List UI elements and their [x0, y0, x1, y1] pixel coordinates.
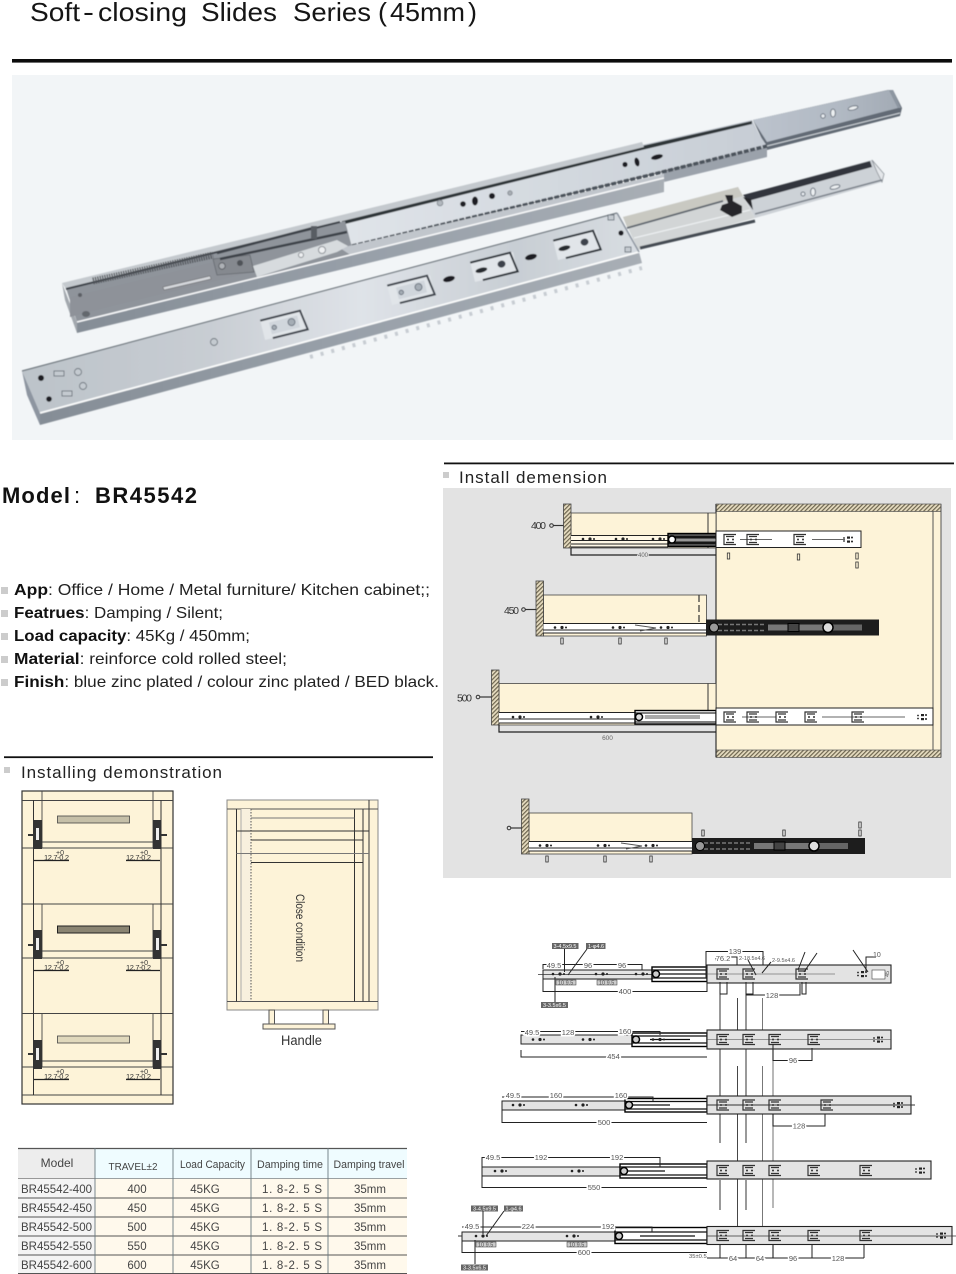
drawer 500: 600 [602, 735, 613, 742]
drawer 500 [457, 670, 933, 742]
feature: Load capacity: Load capacity : 45Kg / 450mm; [14, 628, 250, 645]
cabinet-side dimensions: 2-18.5x4.6 [739, 956, 765, 962]
table body: BR45542-500 [21, 1222, 92, 1234]
drawer 400 [531, 504, 861, 568]
cabinet-side dimensions: 2-9.5x4.6 [772, 958, 795, 964]
table body: 600 [127, 1260, 147, 1272]
table body: 35mm [354, 1203, 386, 1215]
drawer 1 detail: 12.7-0.2 [126, 853, 151, 862]
drawer 3 detail [28, 1036, 167, 1081]
drawer 500: 500 [457, 692, 472, 704]
slide 450: 128 [562, 1028, 574, 1037]
section heading: Install demension: Install demension [459, 468, 607, 487]
slide 600: 600 [578, 1248, 590, 1257]
hole labels: 3-3.5x6.5 [463, 1266, 486, 1272]
table body: BR45542-550 [21, 1241, 92, 1253]
hole labels: 10 9.5 [558, 980, 573, 986]
hole labels [541, 943, 617, 1009]
table body: 1. 8-2. 5 S [262, 1260, 322, 1272]
drawer 3 detail: 12.7-0.2 [44, 1072, 69, 1081]
feature: Featrues: Featrues: Damping / Silent; [14, 605, 223, 622]
table body: 35mm [354, 1260, 386, 1272]
vertical alignment lines [720, 985, 773, 1258]
slide 450: 96 [789, 1056, 797, 1065]
slide 600 [458, 1206, 956, 1272]
slide 550: 192 [535, 1153, 547, 1162]
slide 400: 400 [619, 987, 631, 996]
lower slide slots [260, 310, 308, 340]
table body: 450 [127, 1203, 147, 1215]
table body: 45KG [190, 1260, 220, 1272]
table body: 1. 8-2. 5 S [262, 1241, 322, 1253]
lower slide [22, 160, 884, 425]
hole labels: 10 9.5 [569, 1242, 584, 1248]
upper slide [62, 90, 902, 333]
slide 550: 192 [611, 1153, 623, 1162]
drawer 2 detail: +0 [56, 960, 64, 967]
cabinet-side dimensions: 139 [729, 947, 741, 956]
specification table [18, 1148, 407, 1274]
table body [18, 1148, 407, 1274]
upper slide holes [460, 153, 663, 207]
slide 600: 224 [522, 1222, 534, 1231]
drawer 400: 400 [638, 553, 649, 559]
table body: 35mm [354, 1222, 386, 1234]
drawer 2 detail: 12.7-0.2 [44, 963, 69, 972]
outer rail [40, 252, 642, 425]
slide 400: 96 [618, 961, 626, 970]
drawer 400: 400 [531, 520, 546, 532]
model heading: : [74, 483, 80, 508]
slide 550: 550 [588, 1183, 600, 1192]
cabinet-side dimensions: 76.2 [716, 954, 730, 963]
drawer 1 detail: +0 [140, 850, 148, 857]
table body: 550 [127, 1241, 147, 1253]
slide 400: 49.5 [547, 961, 561, 970]
drawer 2 detail [28, 926, 167, 972]
table body: 35mm [354, 1184, 386, 1196]
drawer 450 [504, 581, 879, 644]
slide 500: 160 [550, 1091, 562, 1100]
section heading: Installing demonstration: Installing demonstration [21, 763, 222, 782]
slide 450 [521, 1027, 891, 1065]
drawer 2 detail: +0 [140, 960, 148, 967]
feature: Material: Material : reinforce cold rolled steel; [14, 651, 287, 668]
slide 500: 160 [615, 1091, 627, 1100]
diagram: side view, close condition with handle [227, 800, 378, 1048]
table body: 1. 8-2. 5 S [262, 1184, 322, 1196]
table header: Model [41, 1156, 73, 1170]
slide 400 [538, 943, 891, 1009]
slide 600: 64 [756, 1254, 764, 1263]
model heading: Model [2, 483, 70, 508]
hole labels: 3-4.5x9.5 [473, 1206, 496, 1212]
cabinet [716, 504, 941, 758]
section heading: Installing demonstration [4, 756, 433, 782]
slide 450: 49.5 [525, 1028, 539, 1037]
handle [263, 1010, 335, 1048]
table body: 35mm [354, 1241, 386, 1253]
close condition label: Close condition [293, 894, 305, 962]
table body: 45KG [190, 1184, 220, 1196]
spring [93, 255, 213, 281]
middle rail [623, 187, 755, 250]
slide 500: 500 [598, 1118, 610, 1127]
handle: Handle [281, 1033, 322, 1048]
slide 500: 49.5 [506, 1091, 520, 1100]
table body: 45KG [190, 1222, 220, 1234]
hole labels: 1-φ4.6 [588, 944, 604, 950]
table body: BR45542-400 [21, 1184, 92, 1196]
table body: 400 [127, 1184, 147, 1196]
slide 600: 192 [602, 1222, 614, 1231]
table body: 500 [127, 1222, 147, 1234]
table header: Damping travel [334, 1159, 404, 1171]
product photo: two ball-bearing drawer slides [12, 75, 953, 440]
drawer closed position [507, 799, 865, 862]
table header: Damping time [257, 1159, 323, 1171]
drawer 3 detail: +0 [56, 1069, 64, 1076]
hole labels: 10 9.5 [478, 1242, 493, 1248]
slide 600: 35±0.5 [689, 1254, 707, 1260]
feature: Finish: Finish: blue zinc plated / colour zinc plated / BED black. [14, 674, 439, 691]
table header [18, 1148, 407, 1179]
feature list [1, 582, 439, 691]
slide 550 [482, 1153, 931, 1192]
table body: BR45542-600 [21, 1260, 92, 1272]
section heading: Install demension [443, 462, 954, 487]
title [30, 0, 477, 27]
hole labels [461, 1206, 587, 1272]
slide 600: 49.5 [465, 1222, 479, 1231]
table body: 1. 8-2. 5 S [262, 1222, 322, 1234]
damper body [70, 262, 253, 317]
drawer 1 detail: +0 [56, 850, 64, 857]
panel: install dimension drawings [443, 488, 951, 878]
drawer 3 detail: +0 [140, 1069, 148, 1076]
slide 500 [502, 1091, 915, 1130]
slide 450: 454 [607, 1052, 620, 1061]
diagram: front view of cabinet with three drawers [22, 791, 173, 1104]
cabinet-side dimensions: 10 [873, 952, 881, 959]
hole labels: 3-4.5x9.5 [554, 944, 576, 950]
slide 600: 128 [832, 1254, 844, 1263]
slide 500: 128 [793, 1122, 805, 1130]
hole labels: 10 9.5 [599, 980, 614, 986]
drawer 2 detail: 12.7-0.2 [126, 963, 151, 972]
slide 600: 96 [789, 1254, 797, 1263]
table header: Load Capacity [180, 1159, 245, 1171]
drawer 3 detail: 12.7-0.2 [126, 1072, 151, 1081]
title rule [12, 59, 952, 63]
hole labels: 1-φ4.6 [505, 1206, 522, 1212]
slide 400: 45 [885, 971, 891, 977]
model heading [2, 483, 197, 508]
inner rail [743, 160, 884, 218]
cabinet-side dimensions [706, 947, 881, 1000]
table body: 45KG [190, 1203, 220, 1215]
slide 450: 160 [619, 1027, 631, 1036]
black stopper lever [720, 195, 742, 217]
feature: App: App: Office / Home / Metal furniture/ Kitchen cabinet;; [14, 582, 430, 599]
table body: BR45542-450 [21, 1203, 92, 1215]
slide 400: 96 [584, 961, 592, 970]
technical drawings: mounting hole dimensions for five slide lengths [458, 943, 956, 1272]
table body: 1. 8-2. 5 S [262, 1203, 322, 1215]
table body: 45KG [190, 1241, 220, 1253]
slide 550: 49.5 [486, 1153, 500, 1162]
drawer 450: 450 [504, 605, 519, 617]
drawer 1 detail: 12.7-0.2 [44, 853, 69, 862]
cabinet-side dimensions: 128 [766, 991, 778, 1000]
hole labels: 3-3.5x6.5 [543, 1003, 566, 1009]
table header: TRAVEL±2 [108, 1161, 158, 1173]
slide 600: 64 [729, 1254, 737, 1263]
model heading: BR45542 [95, 483, 197, 508]
drawer 1 detail [28, 816, 167, 862]
